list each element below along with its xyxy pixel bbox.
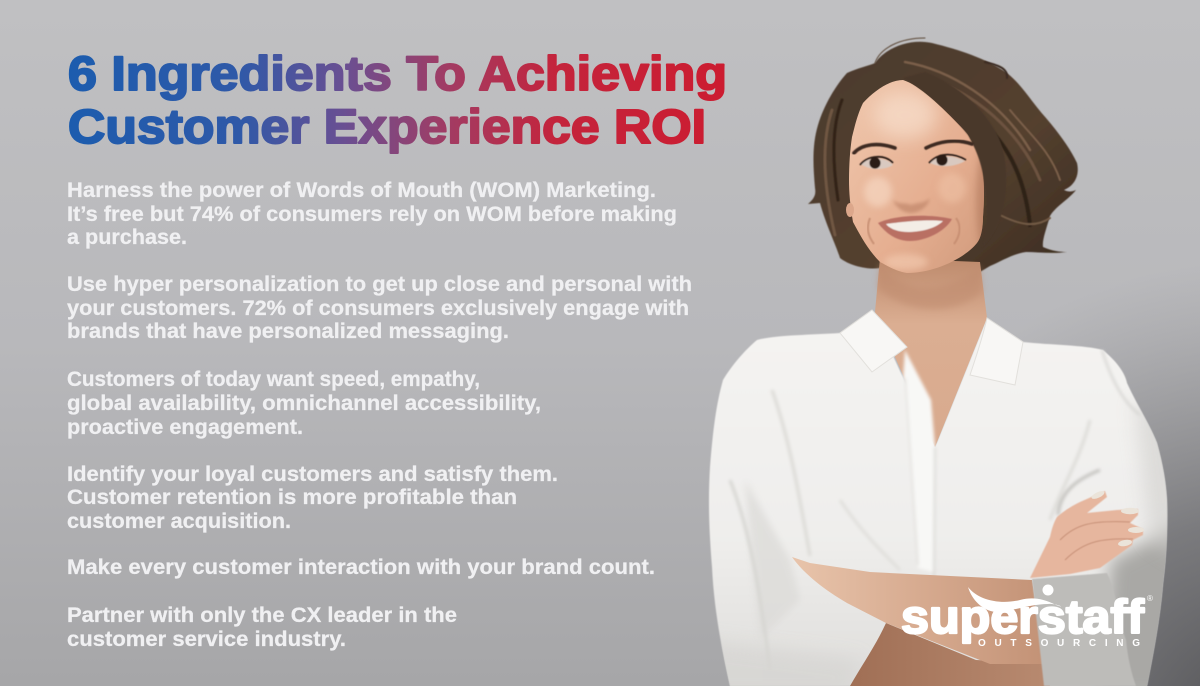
hand xyxy=(1030,491,1143,578)
mouth xyxy=(878,216,952,241)
text block: customers of today: global availability, omnichannel accessibility, xyxy=(67,392,541,415)
text block: word of mouth xyxy=(67,179,677,249)
logo: superstaff outsourcing xyxy=(901,584,1153,649)
title: 6 Ingredients To Achieving xyxy=(68,48,727,101)
text block: every interaction: Make every customer interaction with your brand count. xyxy=(67,556,655,579)
face shading xyxy=(864,91,996,270)
text block: word of mouth: It’s free but 74% of consumers rely on WOM before making xyxy=(67,203,677,226)
fingernails xyxy=(1090,490,1144,547)
text block: word of mouth: a purchase. xyxy=(67,226,187,249)
hair back xyxy=(808,42,1078,272)
logo dot xyxy=(1042,584,1054,596)
text block: word of mouth: Harness the power of Words of Mouth (WOM) Marketing. xyxy=(67,179,656,202)
text block: loyal customers: Identify your loyal customers and satisfy them. xyxy=(67,463,558,486)
face xyxy=(849,80,984,273)
lower forearm xyxy=(850,623,1050,686)
text block: hyper personalization: your customers. 72% of consumers exclusively engage with xyxy=(67,297,689,320)
text block: hyper personalization: Use hyper personalization to get up close and personal with xyxy=(67,273,692,296)
hair strands xyxy=(825,38,1060,235)
logo swoosh xyxy=(968,587,1061,612)
shirt shading xyxy=(700,400,1190,686)
eyes xyxy=(860,154,966,169)
ear xyxy=(846,203,854,217)
text block: loyal customers: Customer retention is more profitable than xyxy=(67,486,517,509)
front hair lock xyxy=(903,72,1006,248)
text block: partner: Partner with only the CX leader in the xyxy=(67,604,457,627)
text block: customers of today: Customers of today want speed, empathy, xyxy=(67,368,480,391)
collar right xyxy=(970,318,1023,385)
logo tagline: OUTSOURCING xyxy=(978,638,1140,649)
logo registered mark: ® xyxy=(1147,594,1153,603)
text block: loyal customers xyxy=(67,463,558,533)
text block: hyper personalization xyxy=(67,273,692,343)
title: Customer Experience ROI xyxy=(68,101,706,154)
upper forearm xyxy=(792,557,1044,664)
collar left xyxy=(840,310,907,372)
shirt placket and folds xyxy=(730,350,1140,670)
neck and chest xyxy=(875,258,987,447)
nose xyxy=(893,198,930,213)
logo wordmark: superstaff xyxy=(901,590,1144,643)
photo: smiling woman with crossed arms xyxy=(700,38,1190,686)
text block: partner: customer service industry. xyxy=(67,628,346,651)
text block: customers of today: proactive engagement. xyxy=(67,416,303,439)
right cuff xyxy=(1032,573,1136,686)
title xyxy=(68,48,727,154)
text block: partner xyxy=(67,604,457,651)
eyebrows xyxy=(854,141,972,153)
text block: hyper personalization: brands that have personalized messaging. xyxy=(67,320,509,343)
text block: customers of today xyxy=(67,368,541,439)
shirt body xyxy=(709,310,1167,686)
text block: loyal customers: customer acquisition. xyxy=(67,510,291,533)
